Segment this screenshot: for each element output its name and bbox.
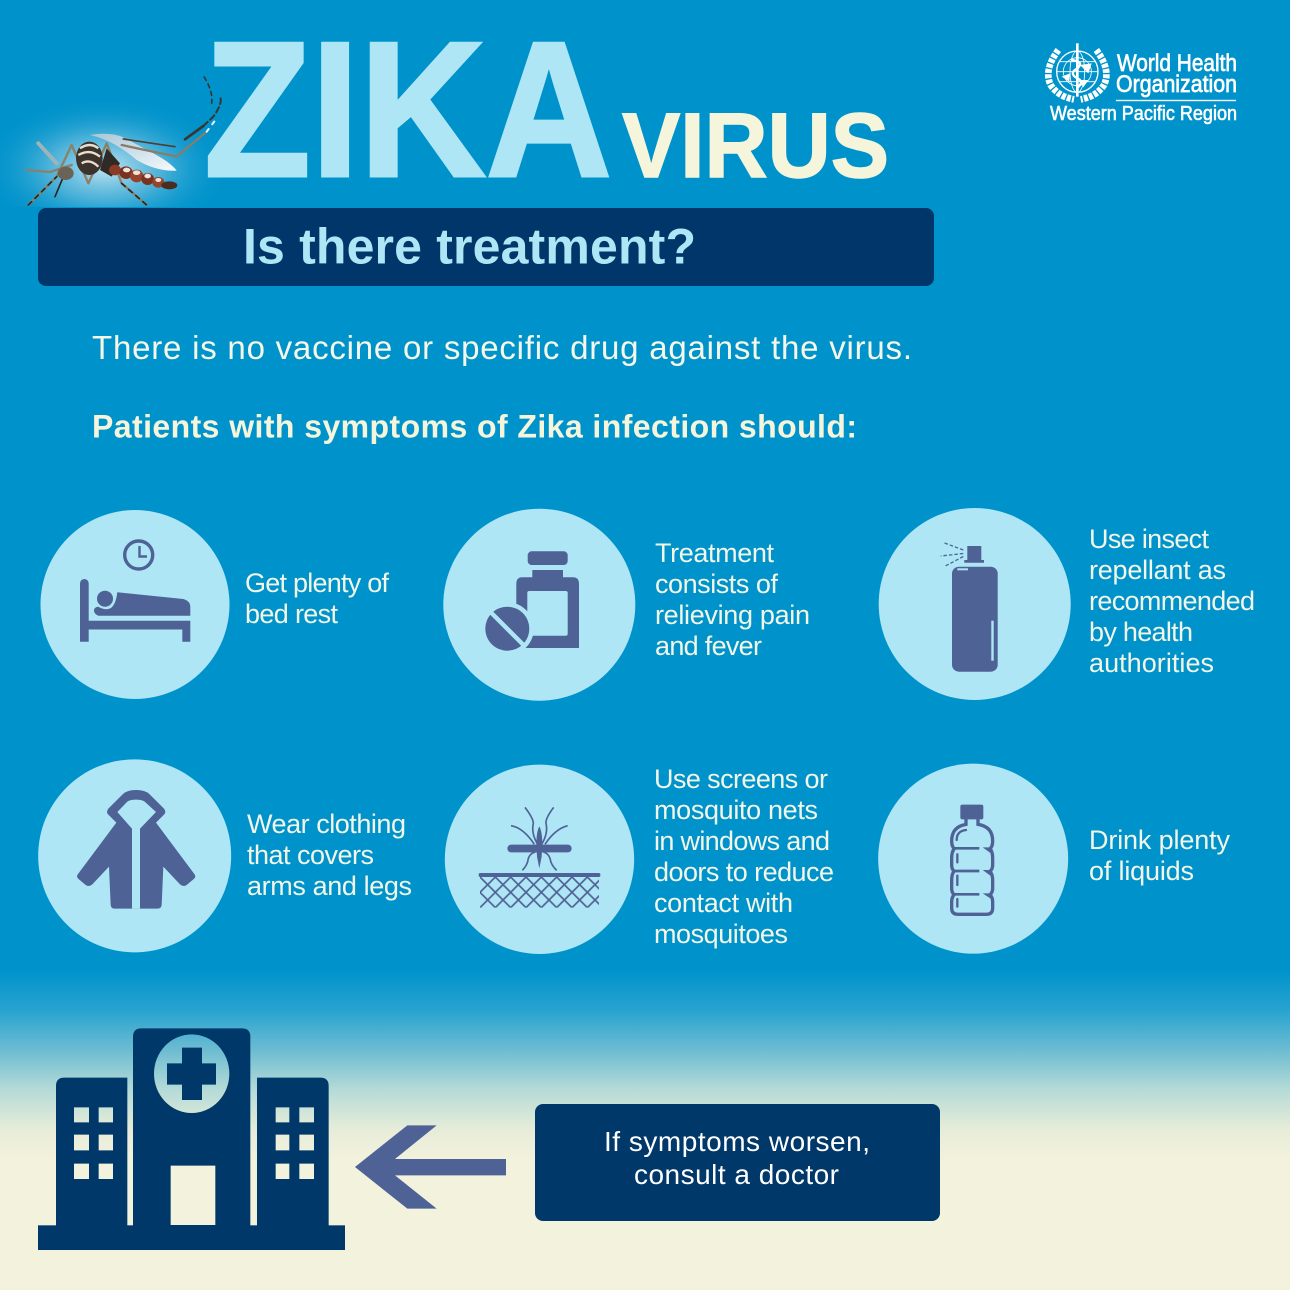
- label: Drink plenty: [1089, 825, 1230, 855]
- WHO emblem: [1048, 43, 1106, 99]
- subheading: Patients with symptoms of Zika infection should:: [92, 408, 857, 444]
- label: Use screens or: [654, 764, 828, 794]
- WHO wordmark: Western Pacific Region: [1050, 103, 1237, 125]
- panel: pain relief: [443, 509, 810, 701]
- WHO wordmark: [1050, 50, 1237, 125]
- label: contact with: [654, 888, 793, 918]
- label: consists of: [655, 569, 778, 599]
- label: mosquitoes: [654, 919, 788, 949]
- label: Use insect: [1089, 524, 1209, 554]
- callout text: If symptoms worsen,: [604, 1126, 870, 1157]
- label: recommended: [1089, 586, 1255, 616]
- mosquito illustration: [2, 76, 222, 207]
- label: Wear clothing: [247, 809, 406, 839]
- label: bed rest: [245, 599, 338, 629]
- label: relieving pain: [655, 600, 810, 630]
- panel: screens and nets: [445, 764, 834, 954]
- label: [1089, 524, 1255, 678]
- icon: hospital: [38, 1028, 345, 1250]
- label: that covers: [247, 840, 374, 870]
- panel: liquids: [878, 764, 1230, 954]
- intro text: There is no vaccine or specific drug against the virus.: [92, 329, 912, 366]
- label: mosquito nets: [654, 795, 818, 825]
- label: [245, 568, 389, 629]
- callout: [535, 1104, 940, 1221]
- arrow: [355, 1125, 506, 1209]
- panel: bed rest: [40, 510, 389, 699]
- label: [1089, 825, 1230, 886]
- label: of liquids: [1089, 856, 1194, 886]
- label: Get plenty of: [245, 568, 389, 598]
- icon: pill bottle: [443, 509, 635, 701]
- WHO wordmark: World Health: [1117, 50, 1237, 77]
- label: doors to reduce: [654, 857, 834, 887]
- title: ZIKA: ZIKA: [204, 1, 612, 217]
- WHO wordmark: Organization: [1116, 71, 1237, 98]
- heading: Is there treatment?: [243, 218, 696, 274]
- icon: mosquito over net: [445, 765, 634, 954]
- label: and fever: [655, 631, 762, 661]
- label: authorities: [1089, 648, 1214, 678]
- icon: hooded jacket: [38, 759, 231, 952]
- label: Treatment: [655, 538, 774, 568]
- label: repellant as: [1089, 555, 1226, 585]
- label: [247, 809, 412, 901]
- label: [655, 538, 810, 661]
- icon: spray can: [879, 508, 1071, 700]
- label: by health: [1089, 617, 1193, 647]
- callout text: [604, 1126, 870, 1190]
- icon: water bottle: [878, 764, 1068, 954]
- label: [654, 764, 834, 949]
- title: VIRUS: VIRUS: [622, 95, 889, 197]
- label: in windows and: [654, 826, 830, 856]
- panel: clothing: [38, 759, 412, 952]
- header banner: [38, 208, 934, 286]
- WHO logo: [1048, 43, 1237, 125]
- label: arms and legs: [247, 871, 412, 901]
- icon: bed and clock: [40, 510, 230, 699]
- panel: insect repellant: [879, 508, 1255, 700]
- callout text: consult a doctor: [634, 1159, 839, 1190]
